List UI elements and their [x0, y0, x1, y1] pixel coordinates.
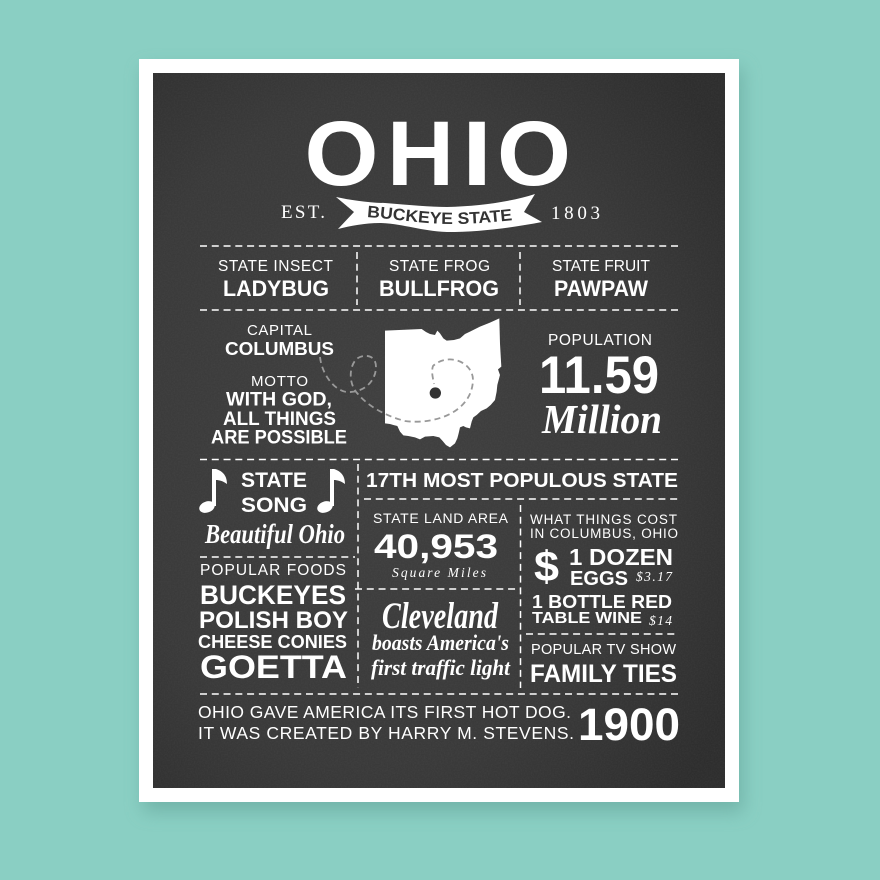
hot dog fact: 1900: [578, 699, 680, 750]
motto: WITH GOD,: [226, 390, 332, 410]
what things cost: IN COLUMBUS, OHIO: [530, 526, 678, 541]
banner: buckeye state: BUCKEYE STATE: [368, 206, 512, 224]
state fruit: STATE FRUIT: [552, 258, 651, 275]
popular tv show: FAMILY TIES: [530, 660, 677, 688]
state fruit: [552, 258, 651, 301]
cleveland fact: [371, 596, 511, 680]
state frog: BULLFROG: [379, 276, 499, 301]
icon: right music note: [316, 469, 345, 515]
capital: COLUMBUS: [225, 338, 334, 359]
title: O: [304, 103, 378, 205]
motto: ARE POSSIBLE: [211, 428, 347, 448]
state frog: STATE FROG: [389, 258, 490, 275]
state land area: 40,953: [374, 528, 498, 566]
what things cost: EGGS: [570, 568, 628, 590]
established year: 1803: [551, 203, 600, 224]
state song: STATE: [241, 469, 307, 492]
popular foods: POPULAR FOODS: [200, 562, 346, 579]
population: 11.59: [539, 346, 659, 405]
motto: ALL THINGS: [223, 409, 336, 430]
capital: CAPITAL: [247, 322, 312, 339]
dashed dividers: [200, 246, 678, 694]
what things cost: TABLE WINE: [532, 610, 642, 627]
what things cost: [530, 512, 678, 628]
banner: buckeye state: [336, 194, 542, 232]
state insect: [218, 258, 334, 301]
capital: [225, 322, 334, 359]
what things cost: $14: [649, 613, 672, 628]
population: [539, 332, 662, 442]
popular foods: [198, 562, 348, 685]
cleveland fact: boasts America's: [372, 630, 509, 655]
icon: left music note: [198, 469, 227, 515]
popular foods: GOETTA: [200, 649, 347, 685]
title: H: [387, 103, 454, 205]
what things cost: WHAT THINGS COST: [530, 512, 677, 527]
state fruit: PAWPAW: [554, 276, 648, 301]
white frame: [139, 59, 739, 802]
what things cost: 1 DOZEN: [569, 544, 673, 570]
hot dog fact: [198, 699, 680, 750]
hot dog fact: OHIO GAVE AMERICA ITS FIRST HOT DOG.: [198, 702, 571, 722]
title: O: [497, 103, 571, 205]
popular foods: POLISH BOY: [199, 607, 348, 634]
established left: EST.: [281, 202, 325, 223]
ohio map: [385, 318, 501, 447]
popular tv show: POPULAR TV SHOW: [531, 642, 676, 658]
what things cost: 1 BOTTLE RED: [532, 591, 672, 612]
state insect: STATE INSECT: [218, 258, 334, 275]
popular foods: CHEESE CONIES: [198, 632, 347, 652]
title: I: [462, 103, 492, 205]
title: [304, 103, 571, 205]
motto: MOTTO: [251, 373, 308, 390]
state land area: STATE LAND AREA: [373, 510, 509, 526]
cleveland fact: Cleveland: [382, 596, 498, 637]
state song: [198, 469, 345, 549]
hot dog fact: IT WAS CREATED BY HARRY M. STEVENS.: [198, 723, 574, 743]
population: POPULATION: [548, 332, 652, 349]
what things cost: $3.17: [636, 569, 673, 584]
icon: dollar sign: $: [534, 543, 559, 591]
state land area: [373, 510, 509, 580]
chalkboard panel: [153, 73, 725, 788]
cleveland fact: first traffic light: [371, 655, 511, 680]
motto: [211, 373, 347, 448]
dashed route to capital: [320, 356, 473, 422]
state song: SONG: [241, 494, 307, 517]
popular foods: BUCKEYES: [200, 580, 346, 610]
state insect: LADYBUG: [223, 276, 329, 301]
state song: Beautiful Ohio: [204, 519, 345, 549]
state frog: [379, 258, 499, 301]
population: Million: [541, 396, 662, 442]
frame shadow: [143, 68, 743, 812]
state land area: Square Miles: [392, 565, 486, 580]
popular tv show: [530, 642, 677, 688]
most populous heading: 17TH MOST POPULOUS STATE: [366, 469, 678, 492]
